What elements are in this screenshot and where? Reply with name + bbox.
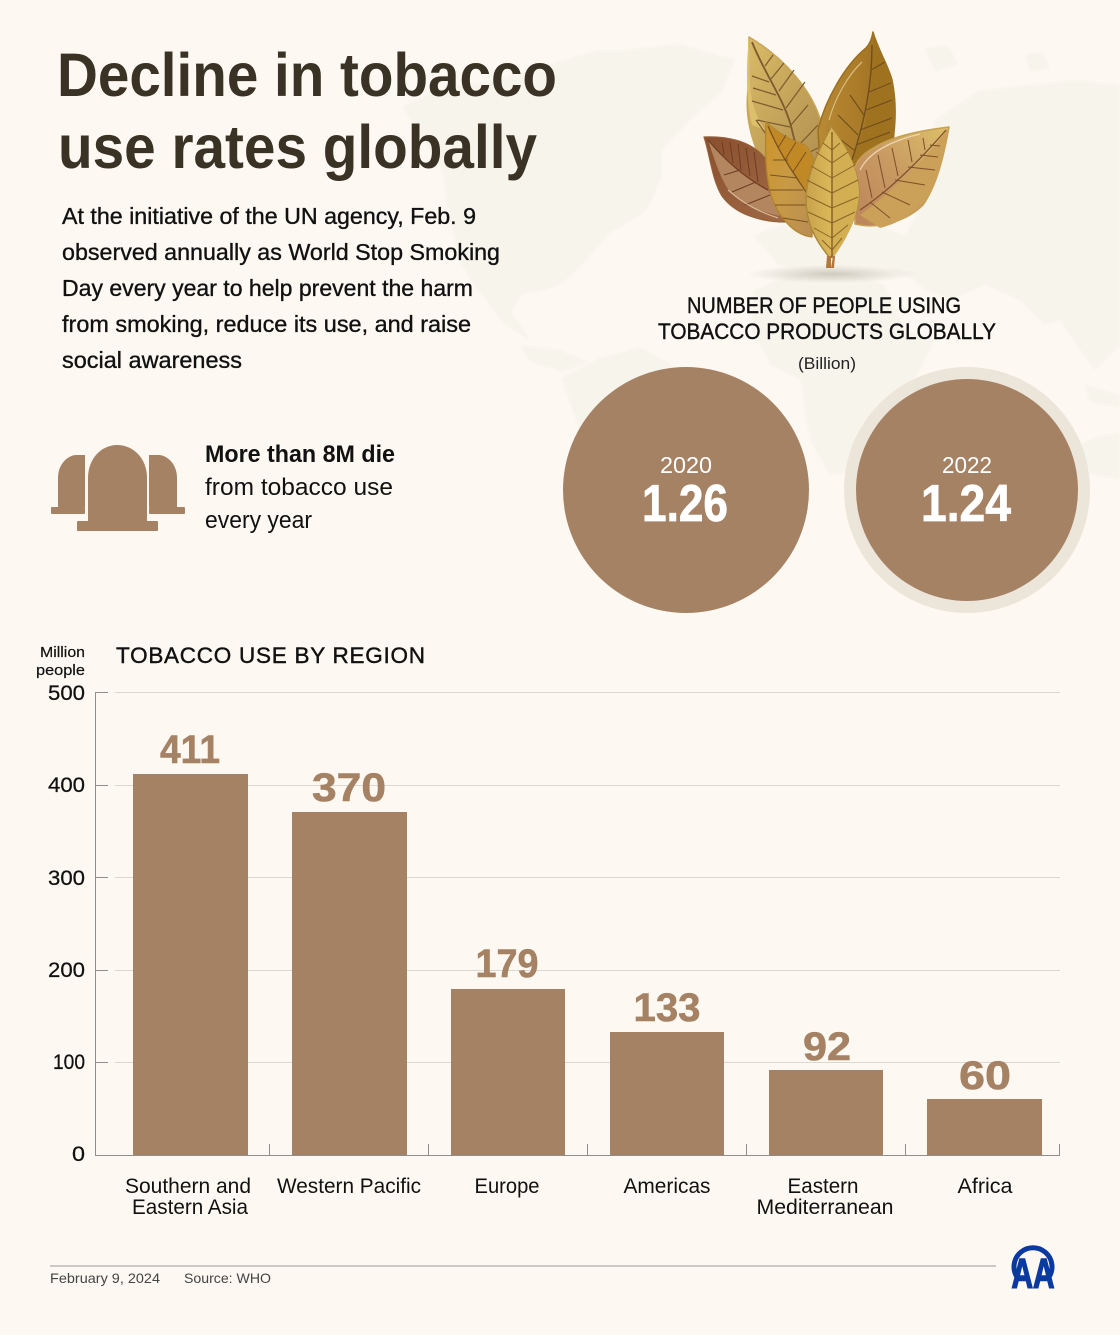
logo: AA: AA	[1012, 1250, 1054, 1297]
death toll text: from tobacco use	[205, 474, 393, 501]
intro text: At the initiative of the UN agency, Feb. 9	[62, 203, 476, 229]
death toll text: More than 8M die	[205, 441, 395, 468]
y-axis unit: people	[36, 662, 85, 679]
bar values: 179	[476, 942, 538, 986]
icon: gravestones	[51, 445, 185, 531]
title	[57, 41, 557, 181]
y-axis labels: 400	[48, 774, 85, 797]
leaf: center front	[806, 127, 859, 268]
y-axis unit: Million	[40, 644, 85, 661]
footer credits	[50, 1270, 271, 1286]
footer credits: February 9, 2024	[50, 1270, 160, 1286]
leaf: upper left	[747, 37, 824, 168]
region labels: Western Pacific	[277, 1175, 421, 1198]
logo: AA	[1012, 1248, 1054, 1297]
unit label: (Billion)	[798, 354, 856, 373]
region labels: Europe	[474, 1175, 540, 1198]
bar values: 133	[634, 986, 700, 1030]
title: use rates globally	[58, 113, 537, 181]
world map backdrop	[402, 44, 1120, 585]
circle: 2022: 2022	[942, 452, 992, 478]
y-axis unit	[36, 644, 85, 679]
chart title: TOBACCO USE BY REGION	[116, 643, 425, 668]
region labels	[125, 1175, 1013, 1219]
leaf: upper right	[818, 32, 896, 168]
region labels: Southern and	[125, 1175, 251, 1198]
bar values: 92	[803, 1025, 851, 1069]
intro text: Day every year to help prevent the harm	[62, 275, 473, 301]
bar chart: tobacco use by region	[48, 682, 1060, 1219]
intro text: observed annually as World Stop Smoking	[62, 239, 500, 265]
region labels: Eastern	[788, 1175, 858, 1198]
bars	[133, 774, 1042, 1155]
y-axis labels: 0	[72, 1143, 85, 1166]
footer rule	[50, 1265, 996, 1267]
leaf: far left brown	[704, 137, 785, 222]
y-axis labels: 500	[48, 682, 85, 705]
circle: 2020	[563, 367, 809, 613]
circle: 2022	[844, 367, 1090, 613]
region labels: Africa	[958, 1175, 1013, 1198]
region labels: Americas	[624, 1175, 710, 1198]
heading: global users	[658, 293, 996, 344]
leaf shadow	[747, 265, 917, 283]
region labels: Eastern Asia	[132, 1196, 248, 1219]
death toll text: every year	[205, 507, 312, 534]
y-axis labels: 100	[53, 1051, 85, 1074]
y-axis labels: 300	[48, 867, 85, 890]
y-axis labels: 200	[48, 959, 85, 982]
footer credits: Source: WHO	[184, 1270, 271, 1286]
bar values: 370	[312, 766, 386, 810]
leaf: far right	[855, 127, 949, 228]
heading: global users: TOBACCO PRODUCTS GLOBALLY	[658, 319, 996, 344]
illustration: tobacco leaves	[704, 32, 949, 268]
intro text: social awareness	[62, 347, 242, 373]
title: Decline in tobacco	[57, 41, 557, 109]
circle: 2020: 1.26	[642, 475, 728, 533]
bar values	[160, 728, 1011, 1098]
bar values: 411	[160, 728, 220, 772]
intro text	[62, 203, 500, 373]
region labels: Mediterranean	[756, 1196, 894, 1219]
y-axis labels	[48, 682, 85, 1166]
leaf: middle left	[766, 122, 814, 237]
heading: global users: NUMBER OF PEOPLE USING	[687, 293, 961, 318]
circle: 2020: 2020	[660, 452, 712, 478]
intro text: from smoking, reduce its use, and raise	[62, 311, 471, 337]
circle: 2022: 1.24	[921, 475, 1011, 533]
bar values: 60	[959, 1054, 1011, 1098]
death toll text	[205, 441, 395, 534]
